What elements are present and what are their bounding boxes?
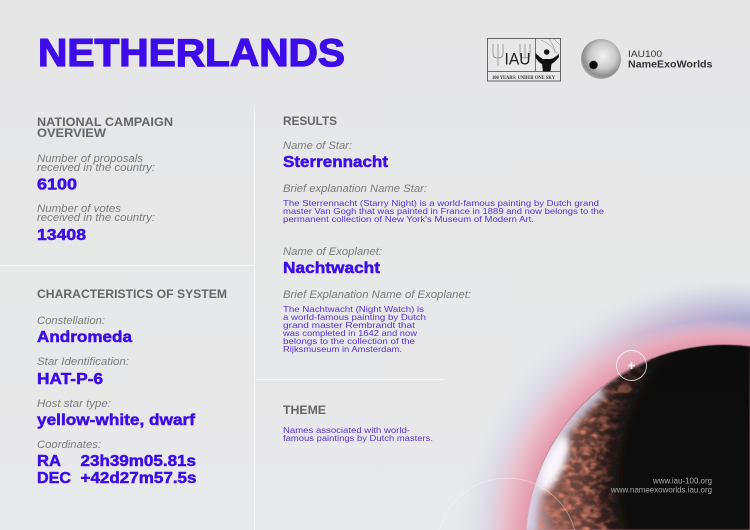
logo: IAU 100 years: [488, 38, 560, 81]
text: star explanation: The Sterrennacht (Starry Night) is a world-famous painting by Dutch grand: [283, 198, 599, 208]
target marker: [616, 350, 646, 380]
label: votes: received in the country:: [37, 212, 155, 224]
label: star explanation: Brief explanation Name Star:: [283, 183, 427, 195]
heading: national campaign overview: OVERVIEW: [37, 128, 106, 140]
text: exoplanet explanation: Rijksmuseum in Amsterdam.: [283, 344, 402, 354]
label: coordinates: Coordinates:: [37, 439, 101, 451]
label: proposals: received in the country:: [37, 162, 155, 174]
value: star name: Sterrennacht: [283, 154, 388, 171]
heading: results: RESULTS: [283, 116, 337, 128]
value: star identification: HAT-P-6: [37, 371, 103, 388]
label: star identification: Star Identification:: [37, 356, 129, 368]
value: declination: +42d27m57.5s: [80, 470, 196, 487]
heading: national campaign overview: NATIONAL CAMPAIGN: [37, 117, 173, 129]
text: exoplanet explanation: The Nachtwacht (Night Watch) is: [283, 304, 424, 314]
label: exoplanet explanation: Brief Explanation Name of Exoplanet:: [283, 289, 471, 301]
panel: results: [282, 116, 604, 354]
text: star explanation: permanent collection of New York's Museum of Modern Art.: [283, 214, 534, 224]
label: host star type: Host star type:: [37, 398, 111, 410]
planet illustration: [439, 270, 750, 530]
text: exoplanet explanation: was completed in 1642 and now: [282, 328, 418, 338]
text: exoplanet explanation: a world-famous painting by Dutch: [283, 312, 426, 322]
value: host star type: yellow-white, dwarf: [37, 412, 196, 429]
website links: www.iau-100.org: [652, 476, 712, 486]
value: declination: DEC: [37, 470, 71, 487]
label: votes: Number of votes: [37, 203, 122, 215]
text: theme: famous paintings by Dutch masters.: [283, 433, 433, 443]
label: constellation: Constellation:: [37, 315, 105, 327]
text: exoplanet explanation: belongs to the collection of the: [283, 336, 415, 346]
panel: characteristics of system: [37, 289, 227, 487]
text: theme: Names associated with world-: [283, 425, 410, 435]
logo: IAU100 NameExoWorlds: NameExoWorlds: [628, 60, 713, 70]
label: proposals: Number of proposals: [37, 153, 144, 165]
value: right ascension: 23h39m05.81s: [80, 453, 196, 470]
panel: national campaign overview: [37, 117, 173, 244]
title: NETHERLANDS: [38, 32, 345, 75]
value: votes: 13408: [37, 227, 86, 244]
logo: IAU100 NameExoWorlds: IAU100: [628, 49, 662, 59]
value: constellation: Andromeda: [37, 329, 132, 346]
value: proposals: 6100: [37, 176, 77, 194]
website links: www.nameexoworlds.iau.org: [610, 486, 712, 494]
heading: characteristics of system: CHARACTERISTICS OF SYSTEM: [37, 289, 227, 301]
label: name of star: Name of Star:: [283, 140, 352, 152]
logo: IAU 100 years: IAU: [504, 50, 530, 68]
label: name of exoplanet: Name of Exoplanet:: [283, 246, 382, 258]
logo: IAU100 NameExoWorlds: [581, 39, 713, 79]
panel: theme: [283, 405, 433, 443]
logo: IAU 100 years: 100 YEARS: UNDER ONE SKY: [492, 76, 555, 81]
value: right ascension: RA: [37, 453, 61, 470]
value: right ascension: [37, 453, 196, 470]
text: star explanation: master Van Gogh that was painted in France in 1889 and now belongs to the: [283, 206, 604, 216]
heading: theme: THEME: [283, 405, 326, 417]
text: exoplanet explanation: grand master Rembrandt that: [283, 320, 416, 330]
value: exoplanet name: Nachtwacht: [283, 260, 380, 277]
value: declination: [37, 470, 196, 487]
